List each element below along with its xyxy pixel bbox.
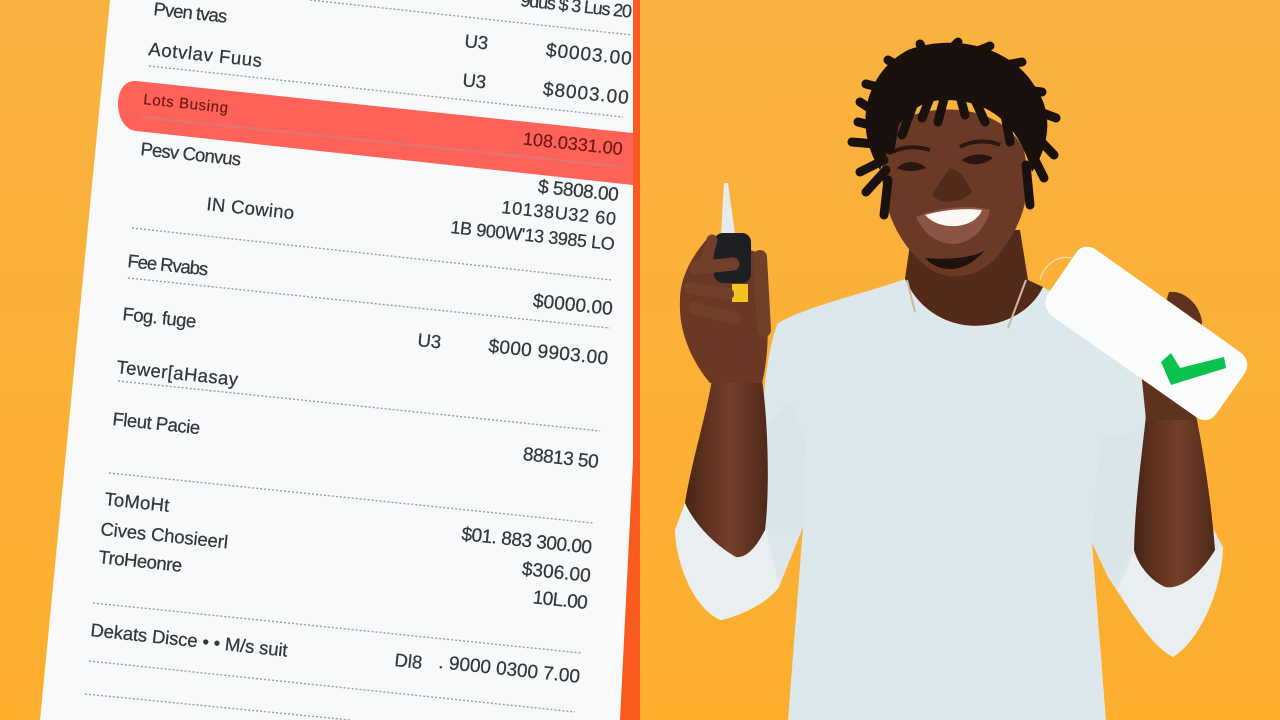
hair xyxy=(852,42,1056,215)
receipt amounts: . 9000 0300 7.00 xyxy=(437,652,581,688)
receipt amounts: $000 9903.00 xyxy=(487,336,609,370)
car key fob xyxy=(714,233,751,283)
receipt red edge xyxy=(618,0,640,720)
left fingers xyxy=(690,240,764,330)
receipt amounts: 10L.00 xyxy=(532,587,589,614)
receipt row labels: Cives Chosieerl xyxy=(100,518,229,552)
receipt row labels: ToMoHt xyxy=(104,488,170,516)
necklace xyxy=(907,280,1026,328)
receipt row labels: IN Cowino xyxy=(206,193,295,223)
smile xyxy=(916,207,990,244)
car key yellow tag xyxy=(732,284,748,302)
receipt amounts: 1B 900W'13 3985 LO xyxy=(450,217,616,254)
nose xyxy=(932,168,972,202)
right hand behind tag xyxy=(1142,292,1202,420)
receipt row labels: Fleut Pacie xyxy=(112,408,201,438)
receipt row labels: Lots Busing xyxy=(143,91,229,117)
face xyxy=(882,110,1027,276)
receipt amounts: 88813 50 xyxy=(522,444,600,473)
receipt row labels xyxy=(90,0,295,661)
receipt amounts: $8003.00 xyxy=(542,79,630,109)
receipt amounts: $0003.00 xyxy=(545,40,633,70)
receipt amounts: U3 xyxy=(464,30,489,53)
receipt amounts: $01. 883 300.00 xyxy=(460,524,593,559)
receipt amounts: U3 xyxy=(417,329,442,352)
receipt amounts: 10138U32 60 xyxy=(501,197,617,229)
left forearm xyxy=(685,380,768,557)
receipt row labels: TroHeonre xyxy=(98,546,183,576)
receipt paper xyxy=(40,0,633,720)
tag card xyxy=(1045,247,1247,420)
receipt amounts: $0000.00 xyxy=(532,291,614,320)
receipt row labels: Fee Rvabs xyxy=(127,250,209,279)
panel: receipt xyxy=(40,0,640,720)
beard xyxy=(925,250,985,269)
receipt row labels: Tewer[aHasay xyxy=(116,356,240,390)
person holding key and tag xyxy=(675,42,1247,720)
neck xyxy=(905,230,1043,326)
receipt row labels: Pesv Convus xyxy=(140,138,242,170)
eyes xyxy=(893,141,1000,171)
receipt amounts xyxy=(394,0,633,688)
green check mark xyxy=(1161,353,1226,385)
receipt amounts: U3 xyxy=(462,69,487,92)
receipt amounts: Dl8 xyxy=(394,649,423,673)
receipt amounts: $306.00 xyxy=(521,559,592,587)
receipt row labels: Dekats Disce • • M/s suit xyxy=(90,619,289,661)
left palm xyxy=(680,238,768,383)
shirt cuffs xyxy=(675,503,1223,657)
car key blade xyxy=(721,183,735,234)
receipt row labels: Fog. fuge xyxy=(122,303,197,332)
right forearm xyxy=(1134,415,1215,587)
receipt amounts: 108.0331.00 xyxy=(522,129,624,159)
receipt amounts: $ 5808.00 xyxy=(537,177,620,206)
highlighted row band xyxy=(118,81,633,185)
price tag xyxy=(1040,247,1247,420)
sleeve shading xyxy=(762,400,1145,577)
receipt row labels: Aotvlav Fuus xyxy=(148,38,263,71)
shirt xyxy=(675,279,1223,720)
tag string xyxy=(1040,257,1072,280)
